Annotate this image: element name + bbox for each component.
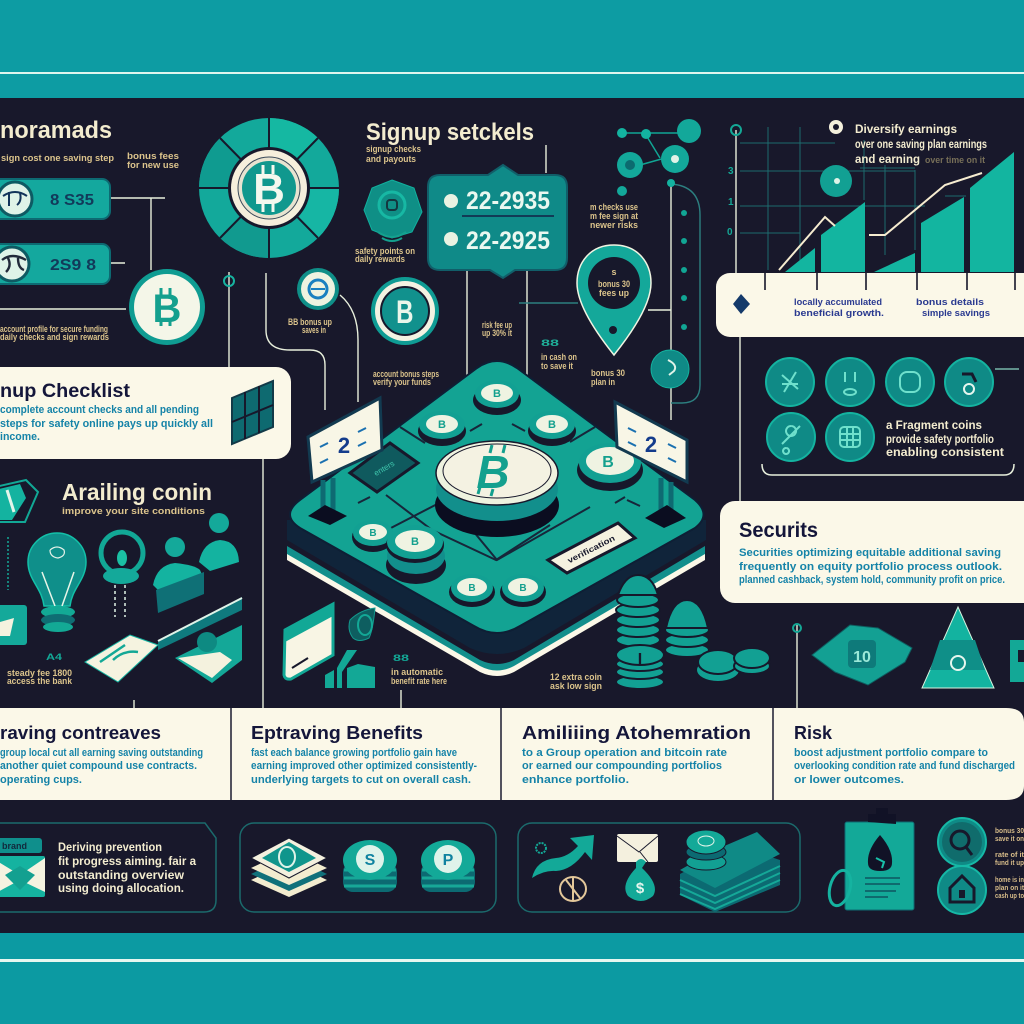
body: checklist: steps for safety online pays up quickly all [0,418,213,430]
pill: value two: 2S9 8 [50,257,96,274]
icon: map pin: s [611,267,617,277]
wheel: bitcoin segmented ring: B [253,165,285,214]
chart text: over time on it [925,155,985,165]
icon: small ring [560,877,586,901]
chart text: over one saving plan earnings [855,137,987,151]
chart text [855,122,987,166]
icon: mini chart [325,650,375,688]
connector lines [0,130,797,708]
text: icons [886,418,1004,459]
caption: card [7,652,73,686]
column: benefits: earning improved other optimized consistently- [251,760,477,772]
column: automation [522,723,751,786]
platform: central isometric board [287,361,706,676]
pill: value two [0,244,110,284]
coins: B [602,454,614,471]
icon: browser window [284,604,333,679]
text: icons: provide safety portfolio [886,432,994,446]
caption: arailing: improve your site conditions [62,506,205,516]
caption: card: steady fee 1800 [7,668,72,678]
icon: ring target [829,120,843,134]
captions: center: m fee sign at [590,211,638,221]
column: automation: Amiliiing Atohemration [522,723,751,743]
top teal band [0,0,1024,98]
grid lines [358,424,640,560]
caption: card: access the bank [7,676,73,686]
coins: B [519,583,527,594]
left sign [308,398,382,525]
heading: arailing conin: Arailing conin [62,479,212,505]
icon: box and pyramid [793,607,1024,688]
icon: rising arrow [532,835,594,878]
chart: rising bars [727,120,1014,272]
caption: small badge: BB bonus up [288,317,332,327]
captions: center: up 30% it [482,328,512,338]
panel: date sign: 22-2925 [466,227,550,255]
text: box one: fit progress aiming. fair a [58,856,197,868]
panel: securits [720,501,1024,603]
icon: coin stack one [343,840,397,892]
icon: striped block and coins [680,830,780,912]
icon: two people [153,513,239,613]
trend line [779,173,982,270]
icon: top left shield [0,480,38,522]
icon: coin stack two: P [443,852,454,869]
captions under board: benefit rate here [391,676,447,686]
coins: B [369,528,377,539]
panel: bottom box one: brand [2,841,27,851]
body: checklist: complete account checks and all pending [0,404,199,416]
label bar [548,523,635,573]
right sign [615,402,687,528]
caption: noramads [1,151,179,170]
body: checklist [0,404,213,443]
axis numbers [727,166,734,238]
caption: gem badge: daily rewards [355,254,405,264]
column: risk: or lower outcomes. [794,774,904,786]
gridlines [740,127,966,270]
body: securits: Securities optimizing equitable additional saving [739,547,1001,559]
captions: center: newer risks [590,220,638,230]
icon: gem badge [364,180,422,241]
icon: film panel [232,381,273,444]
right sign: 2 [645,432,657,457]
icon: money bag [625,859,655,901]
central bitcoin coin: B [476,446,510,498]
dark button: enters [372,459,396,478]
axis ring [731,125,741,135]
axis numbers: 1 [728,197,734,208]
captions: center: risk fee up [482,320,512,330]
icon: coin stacks: I [638,651,642,668]
caption: coin left: account profile for secure funding [0,324,108,334]
panel: chart legend [716,273,1024,337]
legend text: locally accumulated [794,297,882,307]
icon: bitcoin ring coin [371,277,439,345]
tile icon [0,605,27,645]
axis numbers: 0 [727,227,733,238]
column: benefits [251,723,477,786]
icon: small round badge [297,268,339,310]
column: contreaves: group local cut all earning saving outstanding [0,747,203,759]
panel: bottom box three [518,823,800,912]
caption: signup: and payouts [366,154,416,164]
text: box one [58,842,197,895]
icon: coin stacks [616,575,770,689]
coins: B [438,419,446,431]
coins: B [548,419,556,431]
captions: center: account bonus steps [373,369,439,379]
column: automation: enhance portfolio. [522,774,629,786]
heading: checklist: nup Checklist [0,381,131,402]
captions under board: 88 [393,653,409,663]
caption: signup [366,144,421,164]
heading: noramads: noramads [0,117,112,144]
icon: money bag: $ [636,880,645,897]
panel: bottom box two [240,823,496,912]
icon: stacked diamond [251,838,327,897]
dark button [350,443,418,492]
bottom teal band [0,933,1024,1024]
icon: round search [938,818,986,866]
icon: bitcoin ring coin: B [396,294,413,330]
captions: center: bonus 30 [591,368,625,378]
teal node [820,165,852,197]
coins: B [411,536,419,548]
wheel: bitcoin segmented ring [199,118,339,258]
caption: coin left [0,324,109,342]
caption: card: A4 [46,652,62,662]
chart text: and earning [855,152,920,166]
legend text: beneficial growth. [794,308,884,318]
text: icons: enabling consistent [886,445,1004,459]
marker ring [224,276,234,286]
caption: noramads: for new use [127,160,179,170]
icon: envelope [617,834,658,862]
icon: bitcoin coin left [129,269,205,345]
icon: shield small [349,608,375,640]
icon: map pin [577,245,651,355]
caption: small badge [288,317,332,335]
coins: B [493,388,501,400]
captions: center [373,202,638,387]
icon: head in ring [101,532,143,617]
text: box one: using doing allocation. [58,883,184,895]
captions under board: in automatic [391,667,443,677]
icon: coin stack two [421,840,475,892]
caption: gem badge [355,246,415,264]
node cluster [617,119,701,196]
platform top surface [290,361,704,633]
timeline dots [681,210,687,330]
axis numbers: 3 [728,166,734,177]
icon group: round icons [762,358,1019,475]
column: contreaves [0,723,203,786]
caption: noramads: sign cost one saving step [1,153,115,163]
icon: box and pyramid: 10 [853,649,871,666]
panel: bottom box one [0,823,216,912]
pill: value one: 8 S35 [50,192,94,209]
text: box one: Deriving prevention [58,842,162,854]
column: contreaves: another quiet compound use contracts. [0,760,197,772]
legend text [794,297,990,318]
text: box one: outstanding overview [58,870,184,882]
icon: round arrow [651,350,689,388]
body: securits [739,547,1005,586]
captions: right: rate of it [995,852,1024,859]
captions: right [995,828,1024,900]
captions under board [391,653,602,691]
icon: map pin: bonus 30 [598,279,630,289]
column: benefits: underlying targets to cut on overall cash. [251,774,471,786]
captions under board: 12 extra coin [550,672,602,682]
icon: map pin: fees up [599,288,629,298]
section: arailing conin [0,479,242,686]
coins: B [468,583,476,594]
heading: signup setckels: Signup setckels [366,119,534,146]
column: contreaves: operating cups. [0,774,82,786]
chart text: Diversify earnings [855,122,957,136]
captions: center: in cash on [541,352,577,362]
body: checklist: income. [0,431,40,443]
caption: noramads: bonus fees [127,151,179,161]
panel: date sign [428,165,567,278]
column: risk: Risk [794,723,833,743]
captions under board: ask low sign [550,681,602,691]
heading: securits: Securits [739,519,818,542]
panel: signup checklist [0,367,291,459]
captions: center: to save it [541,361,573,371]
legend text: simple savings [922,308,990,318]
caption: signup: signup checks [366,144,421,154]
caption: coin left: daily checks and sign rewards [0,332,109,342]
captions: center: verify your funds [373,377,431,387]
left sign: 2 [338,433,350,458]
column: automation: to a Group operation and bitcoin rate [522,747,727,759]
legend text: bonus details [916,297,984,307]
column: benefits: Eptraving Benefits [251,723,423,743]
platform base layers [287,520,706,676]
body: securits: frequently on equity portfolio process outlook. [739,561,1002,573]
pill: value one [0,179,110,219]
icon: card and laptop [85,597,242,683]
caption: gem badge: safety points on [355,246,415,256]
captions: center: 88 [541,338,559,348]
icon: round house [938,866,986,914]
panel: bottom benefits row [0,708,1024,800]
icon: light bulb [28,533,86,632]
column: automation: or earned our compounding portfolios [522,760,722,772]
coins [352,380,643,607]
column: benefits: fast each balance growing portfolio gain have [251,747,457,759]
icon: clipboard [826,808,914,910]
captions: center: plan in [591,377,615,387]
central bitcoin coin [435,441,559,537]
captions: center: m checks use [590,202,638,212]
caption: small badge: saves in [302,325,326,335]
panel: date sign: 22-2935 [466,187,550,215]
icon: coin stack one: S [365,852,376,869]
column: risk [794,723,1015,786]
text: icons: a Fragment coins [886,418,982,432]
column: risk: boost adjustment portfolio compare to [794,747,988,759]
column: contreaves: raving contreaves [0,723,161,743]
bars [785,152,1014,272]
icon: bitcoin coin left: B [153,287,181,331]
label bar: verification [566,534,617,565]
